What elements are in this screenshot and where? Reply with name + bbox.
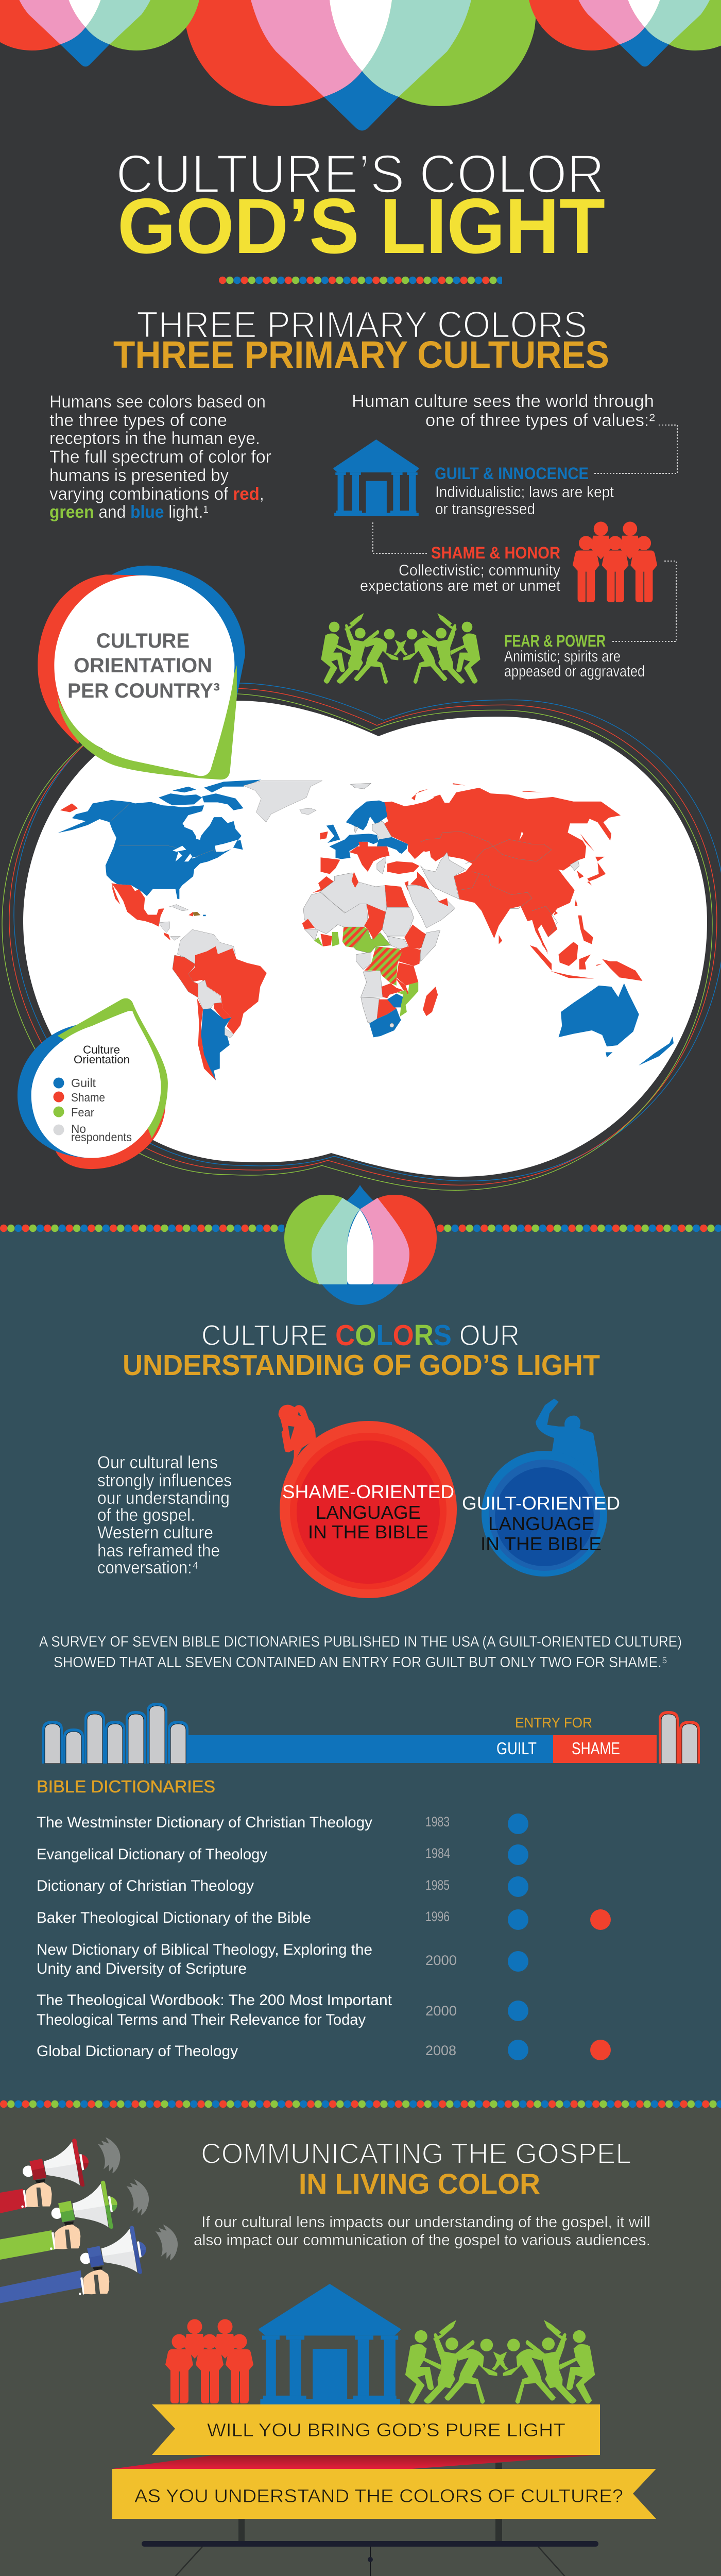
chart header: books and entry bar bbox=[42, 1703, 700, 1764]
icon: temple large bbox=[259, 2284, 401, 2404]
icon: megaphones bbox=[0, 2137, 178, 2303]
text: fear and power bbox=[504, 632, 645, 680]
text: cultural lens impacts communication: also impact our communication of the gospel to various audiences. bbox=[194, 2231, 650, 2249]
ribbon banner bbox=[112, 2404, 656, 2519]
heading: communicating the gospel: IN LIVING COLOR bbox=[299, 2167, 540, 2200]
icon: overlapping light emblem bbox=[284, 1185, 437, 1305]
text: cultural lens: strongly influences bbox=[97, 1471, 232, 1490]
text: cultural lens: of the gospel. bbox=[97, 1505, 195, 1525]
spotlight rig bbox=[142, 2519, 598, 2576]
megaphone: blue bbox=[0, 2225, 178, 2303]
icon: blue books bbox=[42, 1703, 188, 1764]
text: shame and honor: SHAME & HONOR bbox=[431, 544, 560, 562]
row: New Dictionary: 2000 bbox=[425, 1953, 457, 1968]
text: human eye colours: The full spectrum of color for bbox=[49, 447, 271, 467]
title: GOD’S LIGHT bbox=[117, 182, 605, 270]
icon: temple bbox=[333, 439, 419, 516]
row: Westminster bbox=[37, 1814, 528, 1834]
text: cultural lens: Western culture bbox=[97, 1523, 213, 1543]
heading: bible dictionaries: BIBLE DICTIONARIES bbox=[37, 1777, 215, 1796]
legend: culture orientation: Culture bbox=[83, 1043, 120, 1056]
text: guilt and innocence bbox=[435, 464, 614, 518]
legend: culture orientation: Shame bbox=[71, 1091, 105, 1104]
row: Evangelical: 1984 bbox=[425, 1845, 450, 1861]
heading: communicating the gospel: COMMUNICATING THE GOSPEL bbox=[201, 2137, 631, 2170]
row: Baker: Baker Theological Dictionary of the Bible bbox=[37, 1909, 311, 1926]
row: Wordbook: The Theological Wordbook: The 200 Most Important bbox=[37, 1992, 392, 2009]
text: shame and honor: Collectivistic; community bbox=[399, 561, 560, 579]
row: New Dictionary: Unity and Diversity of Scripture bbox=[37, 1960, 247, 1977]
circle: guilt-oriented language: GUILT-ORIENTED bbox=[462, 1493, 620, 1514]
world map panel bbox=[2, 683, 721, 1190]
text: survey of seven dictionaries: SHOWED THAT ALL SEVEN CONTAINED AN ENTRY FOR GUILT BUT ONLY TWO FOR SHAME.⁵ bbox=[54, 1654, 667, 1671]
heading: culture colors our understanding: CULTURE COLORS OUR bbox=[201, 1319, 520, 1352]
icon: people group large bbox=[165, 2319, 253, 2403]
text: human eye colours: humans is presented by bbox=[49, 466, 229, 485]
text: cultural lens: Our cultural lens bbox=[97, 1453, 218, 1472]
dotted colour divider bbox=[219, 276, 502, 284]
text: human culture values intro: Human culture sees the world through bbox=[352, 392, 654, 411]
text: cultural lens: has reframed the bbox=[97, 1541, 220, 1561]
text: human culture values intro bbox=[352, 392, 655, 430]
map: New Zealand bbox=[639, 1037, 674, 1065]
text: cultural lens impacts communication bbox=[194, 2213, 650, 2249]
heading: three primary colors: THREE PRIMARY CULTURES bbox=[113, 333, 609, 376]
callout: culture orientation per country: CULTURE bbox=[96, 630, 190, 652]
legend: culture orientation: Orientation bbox=[74, 1053, 130, 1066]
callout: culture orientation per country bbox=[38, 566, 245, 779]
map: Americas bbox=[58, 779, 322, 1080]
circle: shame-oriented language: SHAME-ORIENTED bbox=[282, 1481, 454, 1502]
legend: culture orientation bbox=[18, 998, 168, 1169]
text: human eye colours: varying combinations of red, bbox=[49, 484, 264, 504]
icon: red books bbox=[659, 1711, 700, 1764]
text: human eye colours: Humans see colors based on bbox=[49, 392, 266, 412]
row: Evangelical bbox=[37, 1844, 528, 1865]
heading: three primary colors bbox=[113, 304, 609, 376]
legend: culture orientation: No bbox=[71, 1122, 86, 1136]
circle: guilt-oriented language: LANGUAGE bbox=[488, 1513, 594, 1534]
text: cultural lens impacts communication: If our cultural lens impacts our understanding of the gospel, it will bbox=[201, 2213, 650, 2231]
row: Global: Global Dictionary of Theology bbox=[37, 2043, 238, 2060]
table: dictionaries by year and entry bbox=[37, 1814, 611, 2060]
legend: culture orientation: Guilt bbox=[71, 1076, 96, 1090]
row: New Dictionary bbox=[37, 1941, 528, 1977]
row: Wordbook: Theological Terms and Their Relevance for Today bbox=[37, 2011, 366, 2028]
row: Global bbox=[37, 2040, 611, 2060]
text: cultural lens bbox=[97, 1453, 232, 1578]
row: Baker: 1996 bbox=[425, 1909, 450, 1924]
chart header: books and entry bar: SHAME bbox=[572, 1739, 620, 1758]
text: human eye colours bbox=[49, 392, 271, 522]
row: Christian Theology: 1985 bbox=[425, 1877, 450, 1893]
text: guilt and innocence: or transgressed bbox=[435, 500, 535, 518]
legend: culture orientation: Fear bbox=[71, 1106, 94, 1119]
row: New Dictionary: New Dictionary of Biblical Theology, Exploring the bbox=[37, 1941, 372, 1958]
text: guilt and innocence: GUILT & INNOCENCE bbox=[435, 464, 589, 483]
row: Christian Theology bbox=[37, 1876, 528, 1897]
circle: guilt-oriented language bbox=[462, 1399, 620, 1577]
title bbox=[116, 144, 605, 270]
text: human eye colours: green and blue light.¹ bbox=[49, 502, 209, 522]
row: Christian Theology: Dictionary of Christian Theology bbox=[37, 1877, 254, 1894]
heading: culture colors our understanding: UNDERSTANDING OF GOD’S LIGHT bbox=[123, 1349, 600, 1382]
chart header: books and entry bar: ENTRY FOR bbox=[515, 1715, 592, 1731]
text: fear and power: FEAR & POWER bbox=[504, 632, 606, 650]
text: cultural lens: our understanding bbox=[97, 1488, 230, 1508]
row: Wordbook bbox=[37, 1992, 528, 2028]
text: human eye colours: the three types of cone bbox=[49, 411, 227, 430]
circle: shame-oriented language: IN THE BIBLE bbox=[308, 1521, 428, 1543]
circle: shame-oriented language bbox=[279, 1405, 457, 1598]
text: fear and power: Animistic; spirits are bbox=[504, 647, 621, 665]
text: human eye colours: receptors in the human eye. bbox=[49, 429, 260, 448]
title: CULTURE’S COLOR bbox=[116, 144, 605, 205]
heading: culture colors our understanding bbox=[123, 1319, 600, 1382]
legend: culture orientation: respondents bbox=[71, 1130, 132, 1144]
top overlapping colour balloons bbox=[0, 0, 721, 131]
map: Europe, Africa, Asia, Australia bbox=[302, 783, 642, 1058]
circle: guilt-oriented language: IN THE BIBLE bbox=[480, 1533, 602, 1554]
text: fear and power: appeased or aggravated bbox=[504, 662, 645, 680]
row: Evangelical: Evangelical Dictionary of Theology bbox=[37, 1846, 267, 1863]
dotted divider: section two bbox=[0, 1224, 721, 1232]
icon: fighters bbox=[321, 613, 480, 684]
icon: raised-hand figure bbox=[536, 1399, 600, 1486]
heading: three primary colors: THREE PRIMARY COLORS bbox=[136, 304, 587, 346]
row: Westminster: 1983 bbox=[425, 1814, 450, 1829]
heading: communicating the gospel bbox=[201, 2137, 631, 2200]
dotted divider: section three bbox=[0, 2100, 721, 2108]
text: survey of seven dictionaries bbox=[39, 1634, 682, 1671]
text: human culture values intro: one of three types of values:² bbox=[425, 411, 655, 430]
text: cultural lens: conversation:⁴ bbox=[97, 1558, 199, 1578]
row: Westminster: The Westminster Dictionary of Christian Theology bbox=[37, 1814, 372, 1831]
text: shame and honor: expectations are met or unmet bbox=[360, 577, 560, 595]
circle: shame-oriented language: LANGUAGE bbox=[316, 1502, 421, 1523]
text: guilt and innocence: Individualistic; laws are kept bbox=[435, 483, 614, 501]
icon: praying figure bbox=[279, 1405, 316, 1466]
megaphone: red bbox=[0, 2137, 120, 2213]
ribbon banner: AS YOU UNDERSTAND THE COLORS OF CULTURE? bbox=[134, 2485, 623, 2506]
icon: people group bbox=[573, 522, 657, 602]
callout: culture orientation per country: ORIENTATION bbox=[74, 654, 212, 677]
row: Wordbook: 2000 bbox=[425, 2003, 457, 2019]
text: shame and honor bbox=[360, 544, 560, 595]
row: Global: 2008 bbox=[425, 2043, 456, 2058]
ribbon banner: WILL YOU BRING GOD’S PURE LIGHT bbox=[207, 2419, 565, 2441]
megaphone: green bbox=[0, 2179, 149, 2260]
row: Baker bbox=[37, 1909, 611, 1930]
callout: culture orientation per country: PER COUNTRY³ bbox=[67, 680, 220, 702]
chart header: books and entry bar: GUILT bbox=[496, 1739, 537, 1758]
icon: fighters large bbox=[405, 2320, 595, 2404]
